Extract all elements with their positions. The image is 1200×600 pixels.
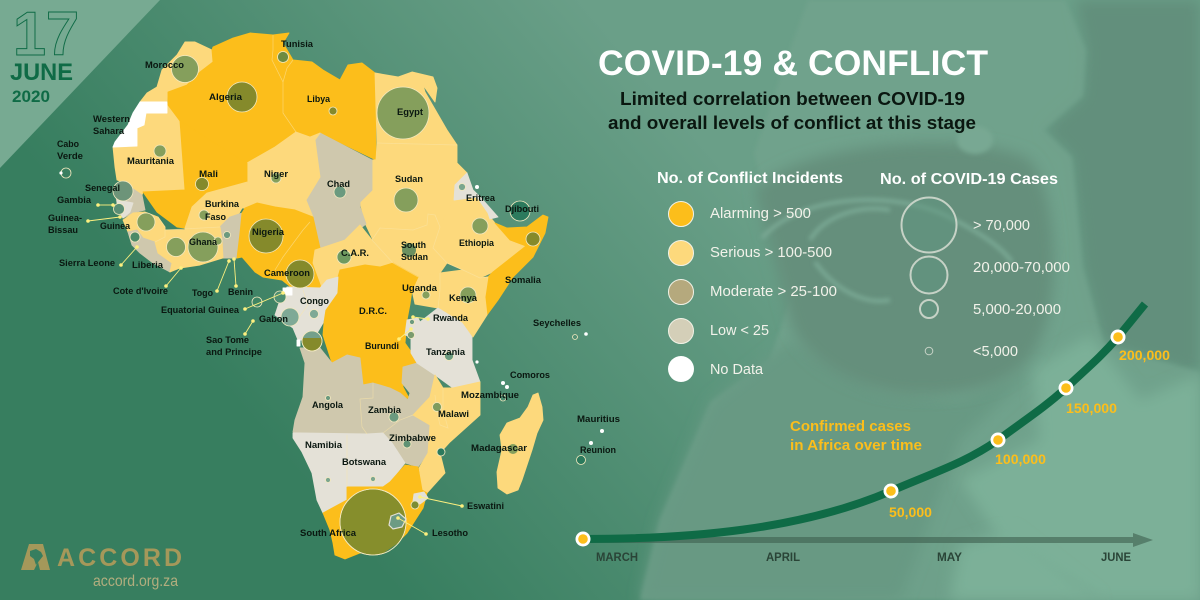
title: COVID-19 & CONFLICT (598, 43, 988, 83)
country: Guinea (123, 212, 165, 242)
islands: white dots (59, 171, 604, 445)
subtitle (608, 89, 976, 133)
country: Senegal (115, 182, 145, 218)
country: Namibia and Botswana (293, 433, 405, 513)
date: 17 June 2020: JUNE (10, 59, 73, 86)
curve value labels: 50,000 (889, 505, 932, 520)
country: Sudan (360, 143, 467, 240)
country labels: Libya (307, 93, 331, 104)
country labels: Malawi (438, 408, 469, 419)
country labels: Cameroon (264, 267, 310, 278)
circle: Uganda (422, 291, 430, 299)
circle: Guinea-Bissau (114, 204, 124, 214)
country labels: Ghana (189, 236, 218, 247)
circle: Mali (196, 178, 208, 190)
legend: conflict incidents: No. of Conflict Incidents (657, 170, 843, 187)
country labels: Benin (228, 286, 253, 297)
country: Cote d'Ivoire and Ghana (155, 227, 223, 272)
country: South Sudan (373, 214, 447, 277)
circle: Benin (224, 232, 230, 238)
country labels: Reunion (580, 444, 616, 455)
subtitle: and overall levels of conflict at this stage (608, 113, 976, 133)
country labels: Western (93, 113, 130, 124)
legend: COVID-19 cases: 5,000-20,000 (973, 302, 1061, 318)
country labels: and Principe (206, 346, 262, 357)
legend: COVID-19 cases: > 70,000 (973, 218, 1030, 234)
circle: Libya (329, 107, 337, 115)
month labels (596, 550, 1131, 564)
circle: Rwanda (410, 320, 414, 324)
circle: Sierra Leone (130, 232, 140, 242)
country labels: Gabon (259, 313, 288, 324)
country: Gambia and Guinea-Bissau (117, 200, 133, 218)
country: Algeria (168, 33, 296, 163)
country labels: Sudan (401, 251, 428, 262)
country labels: Ethiopia (459, 237, 495, 248)
logo: ACCORD: ACCORD (57, 544, 182, 572)
country: D.R.C. (323, 263, 418, 400)
circle: Madagascar (508, 444, 518, 454)
country: Zambia (360, 363, 435, 434)
circle: Congo (310, 310, 318, 318)
subtitle: Limited correlation between COVID-19 (620, 89, 965, 109)
country labels: Gambia (57, 194, 92, 205)
country labels: Togo (192, 287, 213, 298)
month labels: JUNE (1101, 550, 1131, 564)
country labels: Faso (205, 211, 226, 222)
circle: Eswatini (411, 501, 419, 509)
curve value labels: 100,000 (995, 452, 1046, 467)
country labels: Kenya (449, 292, 478, 303)
circle: Botswana (370, 476, 376, 482)
country: Uganda (412, 273, 440, 308)
circle: Burundi (408, 332, 414, 338)
country labels: Eswatini (467, 500, 504, 511)
country labels: Zambia (368, 404, 402, 415)
country: Burkina Faso (185, 182, 247, 230)
country labels: Angola (312, 399, 344, 410)
legend: COVID-19 cases: No. of COVID-19 Cases (880, 171, 1058, 188)
circle: Gabon (281, 308, 299, 326)
date corner triangle (0, 0, 160, 168)
country labels: Egypt (397, 106, 423, 117)
country labels: Guinea- (48, 212, 82, 223)
country: Angola (293, 348, 373, 434)
country: Eritrea (454, 173, 498, 219)
country: Mauritania (113, 103, 185, 195)
circle: Sao Tome (252, 297, 262, 307)
country labels: Uganda (402, 282, 438, 293)
country: Congo, Gabon, Equatorial Guinea (275, 277, 338, 340)
month labels: APRIL (766, 550, 800, 564)
country: Chad (306, 133, 372, 248)
circle: Cameroon (286, 260, 314, 288)
country labels: Botswana (342, 456, 387, 467)
circle: Zimbabwe (403, 440, 411, 448)
country: Mozambique and Malawi (413, 375, 480, 493)
date: 17 June 2020 (10, 0, 79, 106)
legend: conflict incidents: Alarming > 500 (710, 206, 811, 222)
country: Eswatini (413, 492, 428, 504)
country labels: Zimbabwe (389, 432, 436, 443)
country labels: Seychelles (533, 317, 581, 328)
circle: Zambia (389, 412, 399, 422)
curve value labels (889, 348, 1170, 520)
curve value labels: 200,000 (1119, 348, 1170, 363)
country labels: Chad (327, 178, 350, 189)
logo: ACCORD: accord.org.za (93, 573, 178, 590)
country labels: Burkina (205, 198, 240, 209)
country labels: Sierra Leone (59, 257, 115, 268)
country: Togo and Benin (220, 213, 242, 258)
country: Mali (143, 121, 247, 228)
country labels: Liberia (132, 259, 164, 270)
country: Tunisia (272, 33, 293, 82)
country labels: Lesotho (432, 527, 468, 538)
date: 17 June 2020: 2020 (12, 88, 50, 106)
country labels: Niger (264, 168, 288, 179)
circle: Cote d'Ivoire (166, 238, 186, 256)
legend: COVID-19 cases: <5,000 (973, 344, 1018, 360)
background photo: health worker in protective suit (640, 0, 1200, 600)
country labels: Mali (199, 168, 218, 179)
circle: C.A.R. (337, 250, 351, 264)
circle: Angola (326, 396, 330, 400)
country: Kenya (438, 270, 488, 337)
country labels: Senegal (85, 182, 120, 193)
circle: Eritrea (458, 184, 466, 190)
country labels: Madagascar (471, 442, 527, 453)
country labels: Rwanda (433, 312, 469, 323)
circle: Equatorial Guinea (274, 291, 286, 303)
date: 17 June 2020: 17 (13, 0, 79, 69)
circle: Seychelles (572, 334, 578, 340)
country labels: Equatorial Guinea (161, 304, 240, 315)
circle: Burkina Faso (199, 210, 209, 220)
country labels: Congo (300, 295, 329, 306)
circle: Malawi (432, 402, 442, 412)
curve data points (576, 330, 1126, 546)
circle: Chad (334, 186, 346, 198)
circle: Ethiopia (472, 218, 488, 234)
country labels: Comoros (510, 369, 550, 380)
legend: conflict incidents: Moderate > 25-100 (710, 284, 837, 300)
circle: Tunisia (278, 52, 288, 62)
circle: Ghana (188, 232, 218, 262)
country: no-data patches (283, 288, 300, 346)
country: Morocco (140, 42, 213, 102)
country labels: Morocco (145, 59, 184, 70)
month labels: MAY (937, 550, 962, 564)
country: Ethiopia (433, 197, 526, 278)
leader lines (86, 203, 464, 536)
country labels: Tunisia (281, 38, 314, 49)
country: Sierra Leone and Liberia (128, 230, 172, 272)
country labels: Sahara (93, 125, 125, 136)
circle: Comoros (500, 395, 506, 401)
circle: Somalia (526, 232, 540, 246)
circle: Guinea (137, 213, 155, 231)
circle: Kenya (460, 287, 476, 303)
country labels: Verde (57, 150, 83, 161)
curve: confirmed cases over time (583, 304, 1145, 539)
circle: Niger (271, 173, 281, 183)
country labels: D.R.C. (359, 305, 387, 316)
country: Nigeria and Cameroon (237, 203, 322, 288)
country: Rwanda and Burundi (405, 318, 420, 337)
legend: conflict incidents: No Data (710, 362, 764, 378)
circle: Sudan (394, 188, 418, 212)
country: Egypt (375, 72, 457, 145)
country labels: South Africa (300, 527, 357, 538)
circle: Nigeria (249, 219, 283, 253)
icon: ACCORD Africa mark (21, 544, 50, 570)
country labels: Somalia (505, 274, 542, 285)
country: Libya (283, 60, 376, 160)
country labels: Nigeria (252, 226, 285, 237)
circle: Djibouti (510, 201, 530, 221)
legend: conflict incidents (657, 170, 843, 382)
time axis arrow (583, 533, 1153, 547)
country labels: Guinea (100, 220, 131, 231)
country: Central African Republic (313, 225, 393, 290)
circle: Morocco (172, 56, 198, 82)
country: South Africa (323, 465, 427, 559)
legend: COVID-19 cases (880, 171, 1070, 360)
country labels: Sao Tome (206, 334, 249, 345)
circle: South Sudan (402, 243, 416, 257)
country labels: Bissau (48, 224, 78, 235)
circle: South Africa (340, 488, 406, 556)
country labels: Cabo (57, 138, 79, 149)
country labels: Tanzania (426, 346, 466, 357)
country labels: South (401, 239, 426, 250)
circle: Tanzania (444, 352, 454, 360)
curve caption (790, 419, 922, 454)
map of Africa (113, 33, 548, 559)
circle: Senegal (113, 181, 133, 201)
country labels: Mauritius (577, 413, 620, 424)
country labels (48, 38, 620, 538)
country labels: Algeria (209, 91, 243, 102)
country labels: C.A.R. (341, 247, 369, 258)
COVID-19 case circles (61, 52, 586, 560)
curve caption: in Africa over time (790, 438, 922, 454)
curve value labels: 150,000 (1066, 401, 1117, 416)
legend: COVID-19 cases: 20,000-70,000 (973, 260, 1070, 276)
circle: Egypt (377, 87, 429, 139)
country labels: Mauritania (127, 155, 175, 166)
legend: conflict incidents: Serious > 100-500 (710, 245, 832, 261)
country labels: Burundi (365, 340, 399, 351)
circle: Mozambique (437, 448, 445, 456)
country: Western Sahara, no data (113, 102, 167, 147)
country: Niger (242, 132, 320, 217)
circle: Lesotho (389, 513, 406, 529)
month labels: MARCH (596, 550, 638, 564)
country labels: Sudan (395, 173, 423, 184)
logo: ACCORD (21, 544, 182, 590)
circle: Mauritania (154, 145, 166, 157)
circle: Cabo Verde (61, 168, 71, 178)
country: Somalia (485, 215, 548, 315)
circle: Togo (214, 237, 222, 245)
circle: Reunion (576, 456, 586, 464)
country labels: Mozambique (461, 389, 519, 400)
circle: Namibia (326, 478, 330, 482)
country labels: Namibia (305, 439, 343, 450)
country labels: Cote d'Ivoire (113, 285, 168, 296)
country: Zimbabwe (383, 415, 430, 467)
circle: Algeria (227, 82, 257, 112)
legend: conflict incidents: Low < 25 (710, 323, 769, 339)
country: Tanzania (411, 308, 480, 388)
country: Madagascar (497, 393, 543, 494)
country labels: Eritrea (466, 192, 496, 203)
curve caption: Confirmed cases (790, 419, 911, 435)
country labels: Djibouti (505, 203, 539, 214)
circle: D.R.C. (302, 330, 322, 352)
